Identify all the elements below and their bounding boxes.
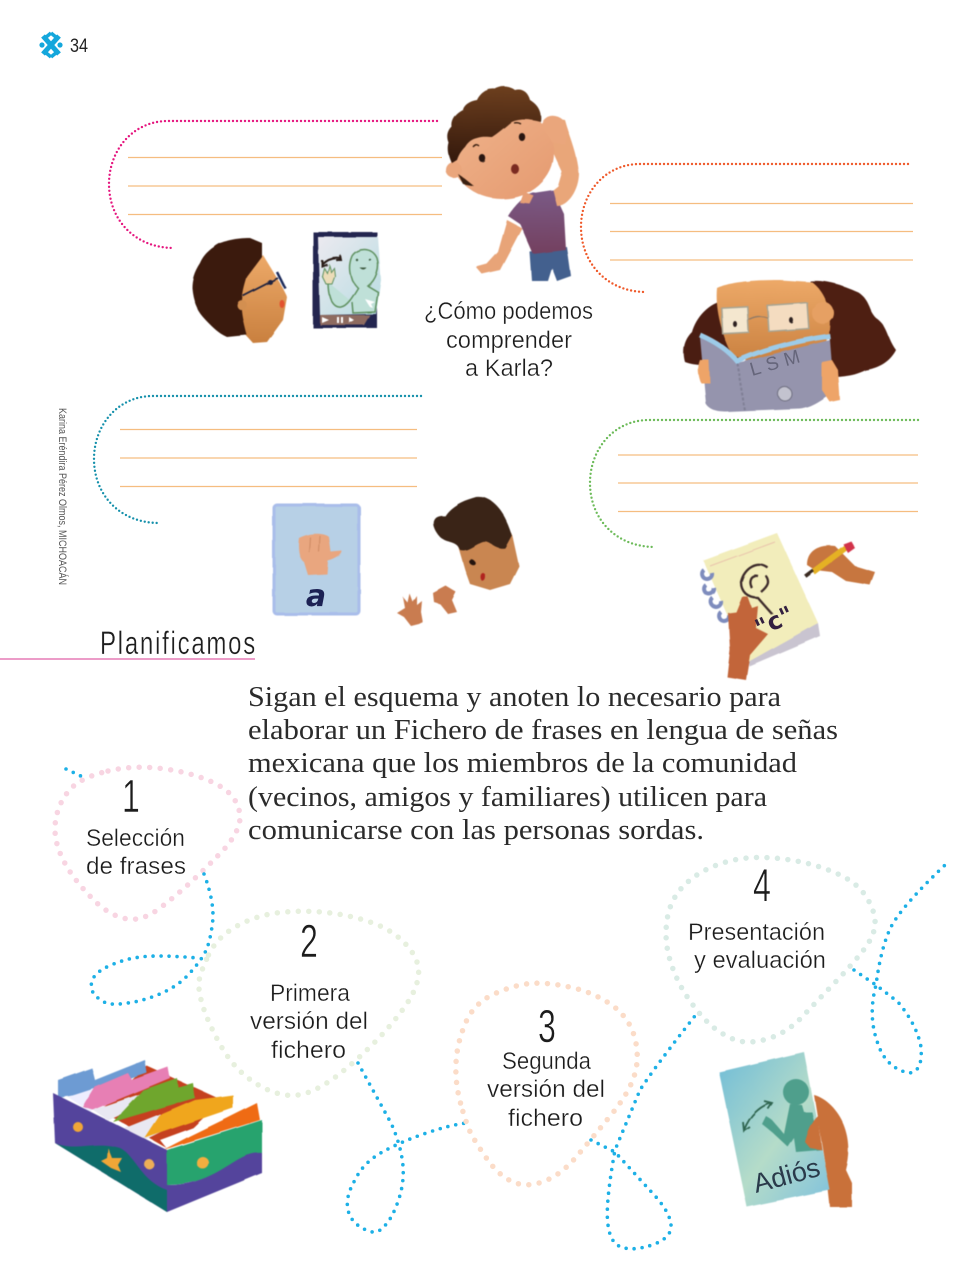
card and fist	[274, 505, 359, 614]
label	[688, 919, 826, 974]
question: how can we understand Karla	[424, 298, 593, 382]
green dotted blob	[199, 911, 419, 1095]
hand at ear	[541, 116, 568, 145]
label: versión del	[250, 1008, 368, 1035]
blue loop from step 4 to page edge	[854, 865, 945, 1073]
instruction paragraph: Sigan el esquema y anoten lo necesario para	[248, 682, 782, 713]
label: Segunda	[502, 1048, 592, 1075]
label	[250, 980, 368, 1064]
panel: teal speech bubble with writing lines	[94, 396, 421, 523]
label: de frases	[86, 853, 186, 880]
label: Presentación	[688, 919, 825, 946]
label: Selección	[86, 825, 185, 852]
blue loop from step 3 to step 4	[591, 1012, 698, 1249]
label: y evaluación	[694, 947, 826, 974]
step 3: segunda versión del fichero	[456, 983, 637, 1185]
panel: orange speech bubble with writing lines	[581, 164, 913, 292]
blue loop from step 1 to step 2	[91, 874, 213, 1004]
heading: Planificamos: Planificamos	[100, 625, 255, 661]
label: versión del	[487, 1076, 605, 1103]
illustration: boy signing with both hands	[397, 497, 519, 626]
card artwork	[719, 1052, 852, 1207]
label	[86, 825, 186, 880]
step 1: selección de frases	[55, 767, 240, 919]
illustration: girl with glasses reading LSM book	[684, 280, 896, 412]
instruction paragraph: comunicarse con las personas sordas.	[248, 815, 704, 846]
question: how can we understand Karla: ¿Cómo podemos	[424, 298, 593, 325]
number 1: 1	[122, 771, 140, 822]
writing lines	[610, 204, 913, 260]
card word: Adiós	[750, 1152, 823, 1199]
pink dotted blob	[55, 767, 240, 919]
shirt	[508, 190, 566, 254]
pants	[530, 247, 571, 281]
peach dotted blob	[456, 983, 637, 1185]
panel: pink speech bubble with writing lines	[109, 121, 442, 248]
illustration: colourful file box with tabs	[53, 1060, 262, 1212]
label: fichero	[508, 1105, 583, 1132]
number 4: 4	[753, 860, 771, 911]
illustration: sign card for the letter a	[274, 505, 359, 614]
left arm	[476, 220, 522, 274]
raised arm	[548, 118, 579, 206]
illustration: boy with glasses seen in profile	[192, 238, 287, 343]
pink dotted outline	[109, 121, 437, 248]
face features	[473, 123, 525, 174]
instruction paragraph: mexicana que los miembros de la comunidad	[248, 748, 797, 779]
illustration: video player with sign language figure	[313, 232, 381, 328]
label: Primera	[270, 980, 351, 1007]
label	[487, 1048, 605, 1132]
panel: green speech bubble with writing lines	[590, 420, 918, 547]
writing lines	[120, 430, 417, 486]
label: fichero	[271, 1037, 346, 1064]
number 2: 2	[300, 916, 318, 967]
head	[450, 107, 554, 199]
letter a: a	[306, 579, 326, 614]
blue loop from step 2 to step 3	[347, 1063, 466, 1232]
step 4: presentación y evaluación	[666, 857, 875, 1042]
credit: vertical author caption: Karina Eréndira Pérez Olmos, MICHOACÁN	[56, 408, 69, 585]
icon: blue knot logo	[39, 33, 63, 57]
step 2: primera versión del fichero	[199, 911, 419, 1095]
question: how can we understand Karla: comprender	[446, 327, 572, 354]
illustration: notebook with sign drawing and writing hand	[702, 533, 875, 680]
writing lines	[128, 158, 442, 214]
quoted letter c: "c"	[751, 600, 798, 642]
teal dotted outline	[94, 396, 421, 523]
illustration: boy cupping his ear	[446, 86, 579, 281]
illustration: card reading Adiós held by a hand	[719, 1052, 852, 1207]
instruction paragraph	[248, 682, 838, 846]
number 3: 3	[538, 1001, 556, 1052]
question: how can we understand Karla: a Karla?	[465, 355, 553, 382]
page number: 34	[70, 36, 88, 57]
blue connector start	[66, 769, 85, 778]
mint dotted blob	[666, 857, 875, 1042]
orange dotted outline	[581, 164, 908, 292]
book title: LSM	[748, 345, 808, 381]
green dotted outline	[590, 420, 918, 547]
page number and logo	[39, 33, 88, 57]
hair	[448, 86, 541, 163]
rough-edged artwork	[684, 280, 896, 412]
instruction paragraph: (vecinos, amigos y familiares) utilicen para	[248, 782, 768, 813]
writing lines	[618, 455, 918, 512]
artwork	[702, 533, 875, 680]
instruction paragraph: elaborar un Fichero de frases en lengua de señas	[248, 715, 838, 746]
